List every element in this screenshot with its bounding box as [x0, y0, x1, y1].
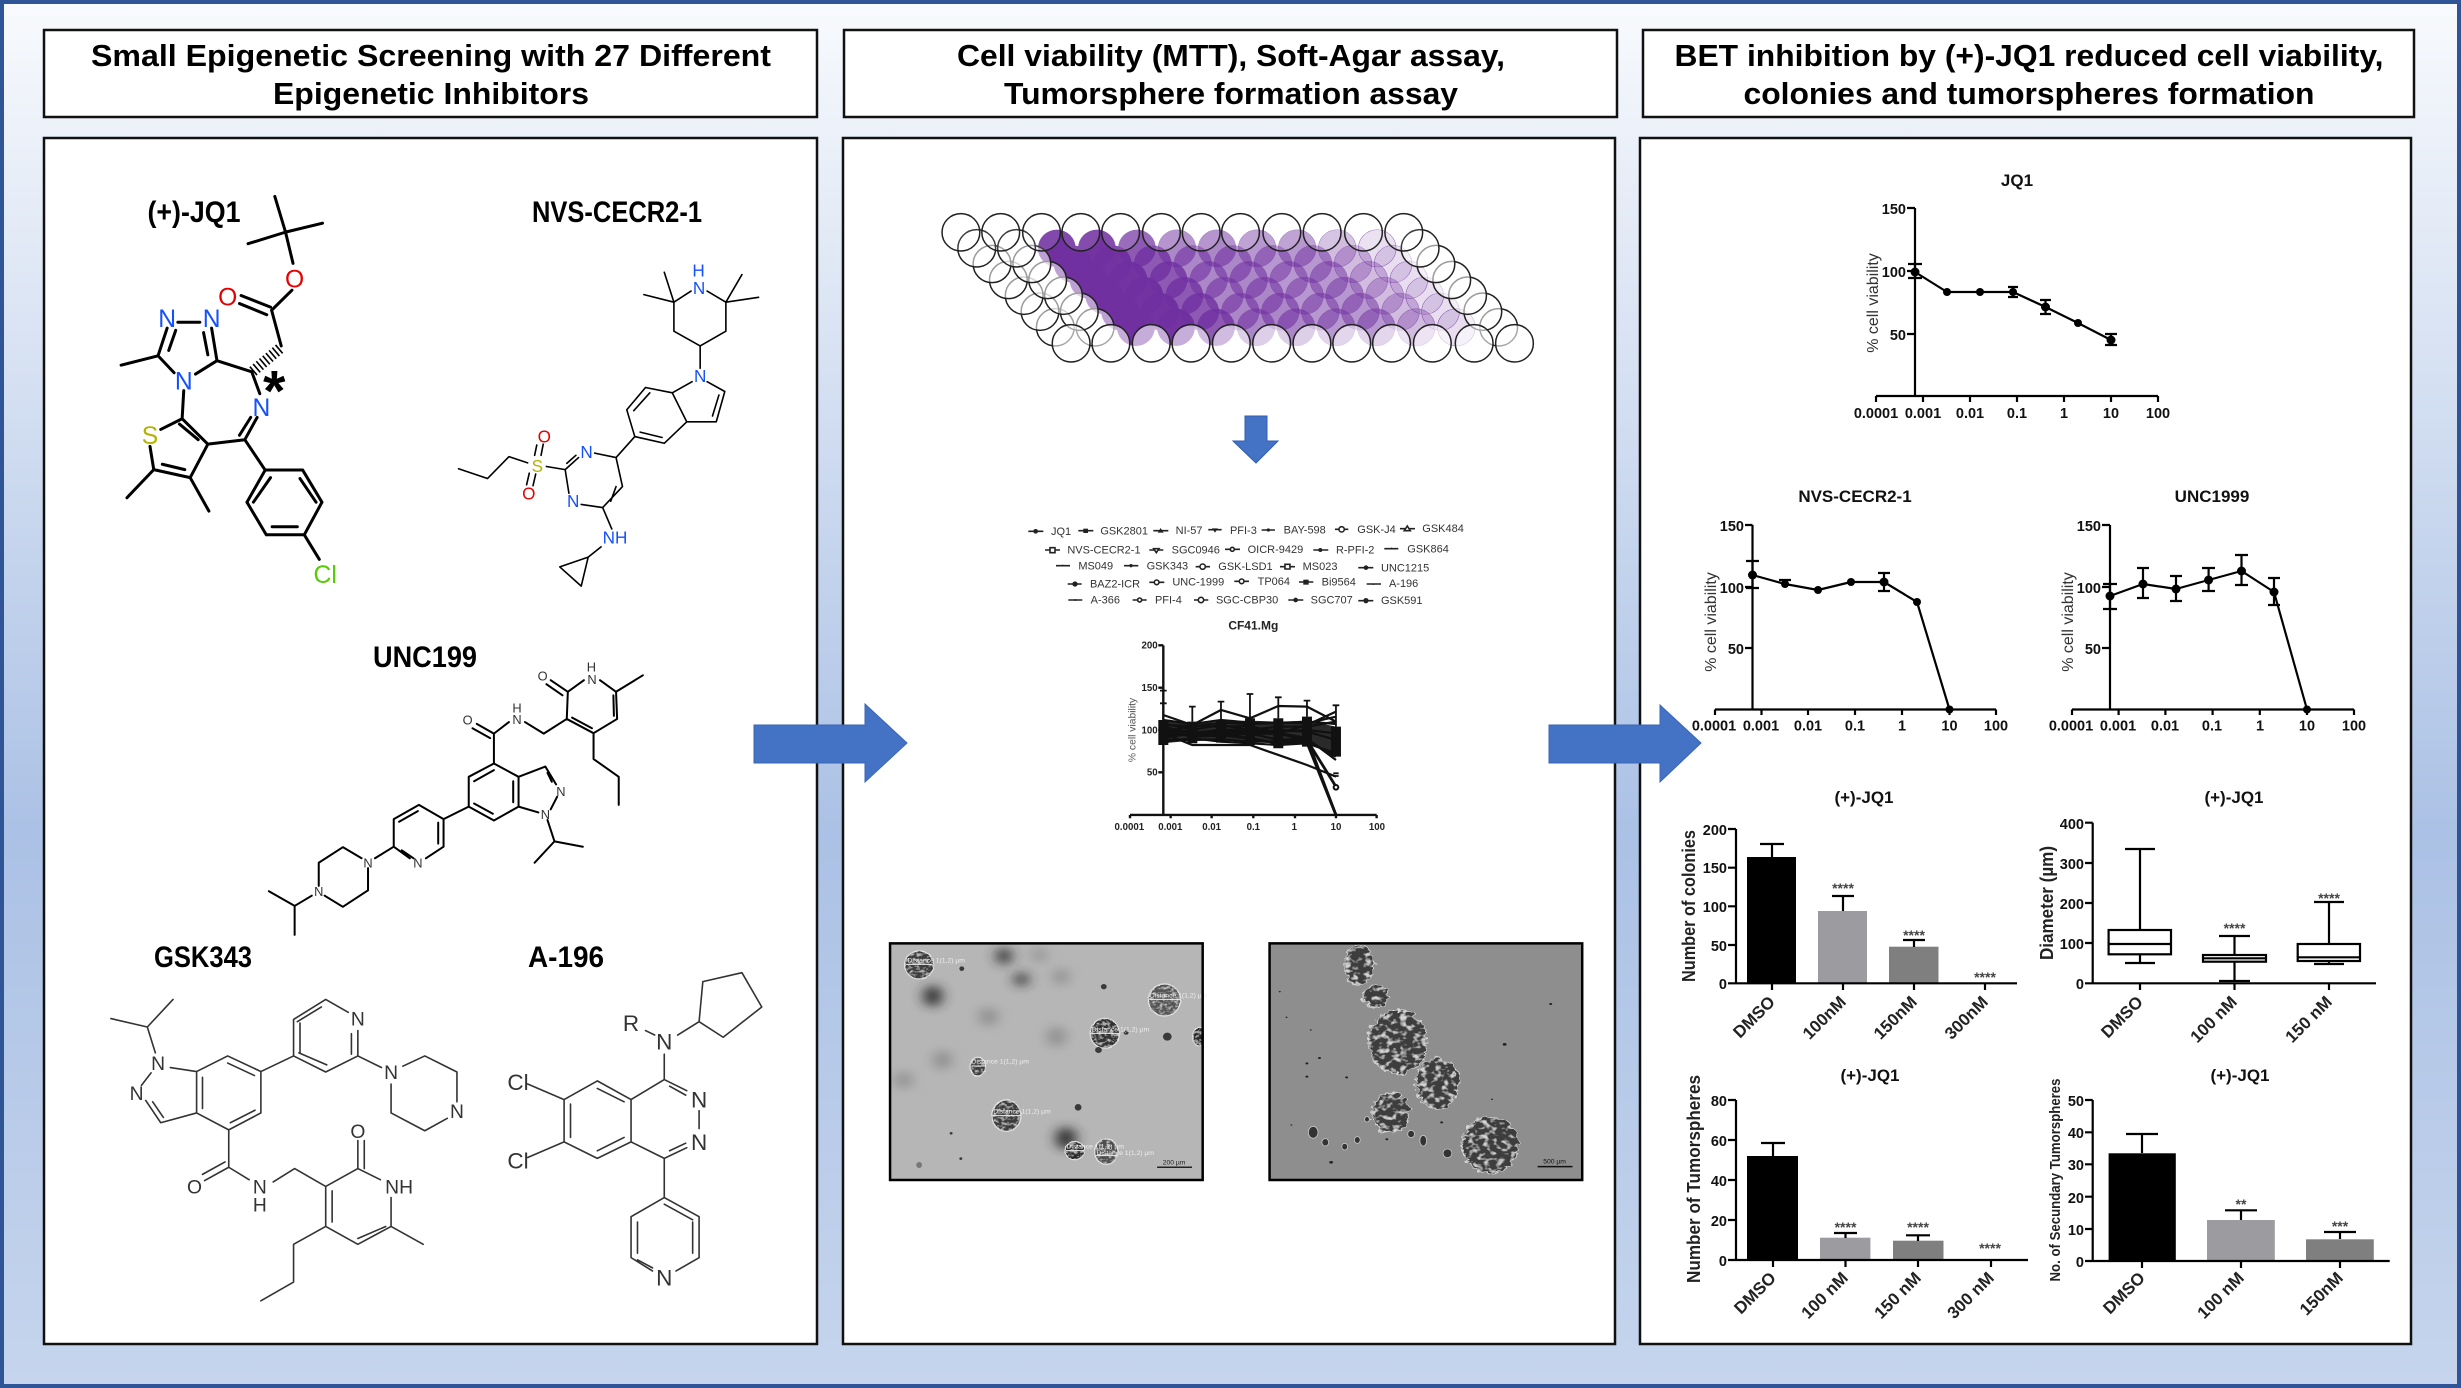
axes: % cell viability	[1127, 697, 1138, 762]
heading: left column: Small Epigenetic Screening with 27 Different	[91, 38, 771, 73]
legend: GSK591	[1381, 595, 1422, 607]
axes: 200	[1142, 641, 1158, 652]
structure: NVS-CECR2-1: S	[532, 456, 543, 476]
axes: 50	[1147, 768, 1158, 779]
structure: UNC199: O	[538, 669, 548, 684]
chart: secondary tumorspheres: **	[2236, 1196, 2247, 1212]
legend: NI-57	[1176, 525, 1203, 537]
legend: GSK484	[1422, 523, 1464, 535]
label: (+)-JQ1: (+)-JQ1	[148, 196, 240, 229]
chart: JQ1 viability: 10	[2103, 406, 2119, 422]
legend: MS023	[1303, 561, 1337, 573]
legend: A-366	[1091, 594, 1120, 606]
structure: NVS-CECR2-1: N	[567, 491, 579, 511]
chart: number of colonies: (+)-JQ1	[1834, 788, 1894, 807]
legend: GSK-J4	[1357, 524, 1396, 536]
chart: secondary tumorspheres: 50	[2068, 1094, 2084, 1110]
illustration: 96-well plate	[942, 214, 1533, 362]
heading: middle column: Cell viability (MTT), Soft-Agar assay,	[957, 38, 1505, 73]
structure: UNC199: N	[314, 884, 323, 899]
chart: secondary tumorspheres	[2047, 1066, 2390, 1323]
chart: secondary tumorspheres: ***	[2332, 1218, 2349, 1234]
chart: secondary tumorspheres: 30	[2068, 1158, 2084, 1174]
structure: NVS-CECR2-1: N	[693, 278, 705, 298]
chart: UNC1999 viability: 100	[2077, 581, 2101, 597]
label: NVS-CECR2-1: NVS-CECR2-1	[532, 196, 702, 229]
chart: number of tumorspheres: Number of Tumorspheres	[1684, 1075, 1704, 1283]
chart: JQ1 viability: 1	[2060, 406, 2068, 422]
heading: left column	[44, 30, 817, 117]
chart: secondary tumorspheres: 10	[2068, 1223, 2084, 1239]
chart title: CF41.Mg	[1228, 618, 1278, 632]
chart: number of colonies: 150nM	[1870, 992, 1921, 1043]
structure: A-196: N	[656, 1030, 672, 1055]
chart: UNC1999 viability: 50	[2085, 642, 2101, 658]
chart: NVS-CECR2-1 viability: 50	[1728, 642, 1744, 658]
chart: colony diameter box plot: DMSO	[2097, 992, 2147, 1042]
chart: secondary tumorspheres: 150nM	[2296, 1268, 2347, 1319]
chart: number of tumorspheres: ****	[1835, 1219, 1857, 1235]
structure: JQ1: N	[175, 368, 193, 395]
legend: A-196	[1389, 578, 1418, 590]
axes: 1	[1292, 822, 1298, 833]
structure: GSK343: H	[253, 1195, 267, 1216]
structure: A-196	[507, 973, 762, 1291]
chart: number of tumorspheres: 40	[1711, 1174, 1727, 1190]
legend: SGC-CBP30	[1216, 595, 1278, 607]
structure: JQ1: O	[285, 266, 304, 293]
chart: number of tumorspheres: 20	[1711, 1214, 1727, 1230]
structure: A-196: R	[623, 1011, 639, 1036]
micrograph: soft-agar colonies: Distance 1(1,2) µm	[1097, 1150, 1154, 1157]
legend: PFI-3	[1230, 525, 1257, 537]
chart: NVS-CECR2-1 viability: 100	[1984, 718, 2008, 734]
structure: JQ1: N	[203, 306, 221, 333]
structure: GSK343: N	[130, 1084, 144, 1105]
structure: GSK343: N	[450, 1102, 464, 1123]
panel: chemical structures	[44, 138, 817, 1344]
structure: JQ1: O	[218, 284, 237, 311]
axes: 0.001	[1158, 822, 1183, 833]
legend: GSK864	[1407, 543, 1449, 555]
chart: colony diameter box plot: 100	[2060, 937, 2084, 953]
chart: number of tumorspheres: ****	[1979, 1240, 2001, 1256]
chart: JQ1 viability: 0.001	[1905, 406, 1941, 422]
heading: right column	[1643, 30, 2414, 117]
axes: 10	[1331, 822, 1341, 833]
micrograph: tumorspheres	[1270, 943, 1582, 1180]
structure: NVS-CECR2-1: N	[694, 366, 706, 386]
chart: JQ1 viability: 0.1	[2007, 406, 2027, 422]
structure: UNC199: N	[587, 672, 597, 687]
structure: GSK343: N	[384, 1063, 398, 1084]
micrograph: soft-agar colonies: Distance 1(1,2) µm	[908, 958, 965, 965]
arrow: left to middle	[754, 704, 907, 782]
chart: secondary tumorspheres: 20	[2068, 1191, 2084, 1207]
chart: JQ1 viability: 100	[1882, 265, 1906, 281]
axes: 100	[1142, 725, 1158, 736]
micrograph: soft-agar colonies: Distance 1(1,2) µm	[993, 1108, 1051, 1115]
chart: number of tumorspheres: ****	[1907, 1219, 1929, 1235]
legend: GSK-LSD1	[1218, 561, 1273, 573]
chart: UNC1999 viability: 0.1	[2202, 718, 2222, 734]
band behind data series	[1163, 721, 1336, 755]
structure: GSK343: N	[253, 1178, 267, 1199]
structure: GSK343: NH	[385, 1178, 413, 1199]
chart: NVS-CECR2-1 viability: 10	[1941, 718, 1958, 734]
chart: number of colonies: DMSO	[1729, 992, 1779, 1042]
structure: GSK343: N	[151, 1054, 165, 1075]
chart: number of tumorspheres: 300 nM	[1944, 1268, 1998, 1323]
chart: JQ1 viability: 100	[2146, 406, 2170, 422]
structure: JQ1: N	[158, 306, 176, 333]
structure: GSK343: O	[187, 1178, 202, 1199]
panel: assays	[843, 138, 1615, 1344]
chart: colony diameter box plot: 0	[2076, 977, 2084, 993]
structure: NVS-CECR2-1	[459, 260, 759, 586]
chart: number of colonies: ****	[1832, 880, 1854, 896]
chart: NVS-CECR2-1 viability: 0.001	[1743, 718, 1779, 734]
chart: number of colonies: 200	[1703, 823, 1727, 839]
heading: right column: BET inhibition by (+)-JQ1 reduced cell viability,	[1674, 38, 2384, 73]
chart: colony diameter box plot: 300	[2060, 857, 2084, 873]
legend: BAY-598	[1284, 524, 1326, 536]
chart: JQ1 viability: 150	[1882, 202, 1906, 218]
chart: number of colonies: ****	[1903, 927, 1925, 943]
chart: number of tumorspheres: 150 nM	[1871, 1268, 1925, 1323]
chart: number of tumorspheres: (+)-JQ1	[1840, 1066, 1900, 1085]
chart: secondary tumorspheres: DMSO	[2099, 1268, 2149, 1318]
chart: colony diameter box plot: ****	[2224, 920, 2246, 936]
chart: NVS-CECR2-1 viability: 0.0001	[1692, 718, 1736, 734]
structure: A-196: N	[691, 1130, 707, 1155]
chart: UNC1999 viability: 0.0001	[2049, 718, 2093, 734]
structure: UNC199: N	[556, 784, 566, 799]
chart: secondary tumorspheres: (+)-JQ1	[2210, 1066, 2270, 1085]
heading: middle column	[844, 30, 1617, 117]
structure: GSK343: N	[351, 1010, 365, 1031]
structure: UNC199: H	[587, 660, 596, 675]
chart: CF41.Mg screening with legend	[1028, 523, 1464, 833]
legend: UNC-1999	[1172, 577, 1224, 589]
micrograph: soft-agar colonies: Distance 1(1,2) µm	[1092, 1026, 1150, 1033]
chart: UNC1999 viability: 0.01	[2151, 718, 2179, 734]
structure: UNC199: H	[512, 700, 522, 715]
label: GSK343: GSK343	[154, 941, 252, 974]
panel: BET inhibition results	[1640, 138, 2411, 1344]
structure: NVS-CECR2-1: O	[538, 426, 551, 446]
structure: A-196: N	[656, 1266, 672, 1291]
chart: number of colonies: 100	[1703, 900, 1727, 916]
structure: JQ1: *	[263, 360, 286, 424]
chart: colony diameter box plot: (+)-JQ1	[2204, 788, 2264, 807]
structure: NVS-CECR2-1: H	[692, 260, 705, 280]
chart: secondary tumorspheres: 100 nM	[2194, 1268, 2248, 1323]
chart: UNC1999 viability: 150	[2077, 519, 2101, 535]
structure: JQ1: Cl	[314, 562, 337, 589]
arrow: middle to right	[1549, 705, 1701, 782]
legend: SGC0946	[1172, 544, 1220, 556]
micrograph: soft-agar colonies: Distance 1(1,2) µm	[1150, 992, 1208, 999]
arrow: down	[1233, 416, 1278, 463]
legend: GSK343	[1147, 560, 1188, 572]
heading: right column: colonies and tumorspheres formation	[1744, 76, 2314, 111]
chart: colony diameter box plot: 400	[2060, 817, 2084, 833]
chart: colony diameter box plot: ****	[2318, 890, 2340, 906]
structure: NVS-CECR2-1: O	[522, 484, 535, 504]
axes: 150	[1142, 683, 1158, 694]
axes: 0.0001	[1115, 822, 1145, 833]
chart: JQ1 viability: % cell viability	[1865, 253, 1882, 353]
legend: NVS-CECR2-1	[1067, 545, 1141, 557]
structure: JQ1: N	[253, 395, 270, 422]
legend: SGC707	[1311, 594, 1353, 606]
micrograph: tumorspheres: 500 µm	[1543, 1159, 1566, 1166]
chart: number of colonies: 300nM	[1941, 992, 1992, 1043]
chart: UNC1999 viability	[2049, 487, 2366, 734]
chart: number of colonies: 100nM	[1799, 992, 1850, 1043]
legend: UNC1215	[1381, 562, 1429, 574]
chart: number of colonies	[1679, 788, 2017, 1043]
chart: secondary tumorspheres: 0	[2076, 1255, 2084, 1271]
structure: UNC199: O	[463, 713, 473, 728]
micrograph: soft-agar colonies: 200 µm	[1163, 1159, 1186, 1166]
chart: number of tumorspheres	[1684, 1066, 2028, 1323]
legend: Bi9564	[1322, 577, 1356, 589]
chart: UNC1999 viability: 1	[2256, 718, 2264, 734]
chart: UNC1999 viability: 10	[2299, 718, 2315, 734]
chart: number of colonies: 50	[1711, 939, 1727, 955]
chart: JQ1 viability: 0.01	[1956, 406, 1984, 422]
structure: UNC199: N	[541, 807, 550, 822]
chart: JQ1 viability: 0.0001	[1854, 406, 1898, 422]
error bars	[1160, 691, 1339, 790]
label: A-196: A-196	[528, 941, 604, 974]
chart: NVS-CECR2-1 viability: 0.01	[1794, 718, 1822, 734]
chart: NVS-CECR2-1 viability: 1	[1898, 718, 1906, 734]
chart: UNC1999 viability: UNC1999	[2175, 487, 2249, 506]
chart: UNC1999 viability: 100	[2342, 718, 2366, 734]
structure: NVS-CECR2-1: N	[580, 442, 593, 462]
chart: number of colonies: 150	[1703, 861, 1727, 877]
structure: A-196: Cl	[507, 1149, 529, 1174]
chart: colony diameter box plot: 150 nM	[2282, 992, 2336, 1047]
structure: JQ1: S	[142, 423, 158, 450]
heading: middle column: Tumorsphere formation assay	[1004, 76, 1459, 111]
legend: JQ1	[1051, 526, 1071, 538]
structure: NVS-CECR2-1: NH	[603, 527, 627, 547]
structure: UNC199: N	[413, 856, 422, 871]
chart: NVS-CECR2-1 viability: 100	[1720, 581, 1744, 597]
chart: NVS-CECR2-1 viability: 150	[1720, 519, 1744, 535]
axes	[1115, 641, 1385, 833]
data series	[1163, 706, 1336, 815]
legend: BAZ2-ICR	[1090, 579, 1140, 591]
chart: JQ1 viability	[1854, 171, 2170, 422]
structure: GSK343	[111, 999, 464, 1301]
chart: number of tumorspheres: 80	[1711, 1094, 1727, 1110]
chart: NVS-CECR2-1 viability: 0.1	[1845, 718, 1865, 734]
chart: colony diameter box plot: 200	[2060, 897, 2084, 913]
chart: colony diameter box plot: Diameter (µm)	[2037, 846, 2057, 960]
chart: colony diameter box plot	[2037, 788, 2376, 1047]
chart: JQ1 viability: 50	[1890, 328, 1906, 344]
chart: colony diameter box plot: 100 nM	[2187, 992, 2241, 1047]
chart: number of tumorspheres: 60	[1711, 1134, 1727, 1150]
chart: number of colonies: Number of colonies	[1679, 830, 1699, 982]
legend: GSK2801	[1100, 525, 1148, 537]
chart: UNC1999 viability: 0.001	[2100, 718, 2136, 734]
chart: JQ1 viability: JQ1	[2001, 171, 2033, 190]
structure: UNC199: N	[363, 856, 373, 871]
chart: secondary tumorspheres: No. of Secundary Tumorspheres	[2047, 1078, 2064, 1282]
legend: PFI-4	[1155, 594, 1182, 606]
micrograph: soft-agar colonies: Distance 1(1,2) µm	[1066, 1144, 1124, 1151]
chart: NVS-CECR2-1 viability: % cell viability	[1703, 572, 1720, 672]
legend: MS049	[1078, 560, 1113, 572]
structure: UNC199	[269, 660, 643, 935]
axes: 0.01	[1202, 822, 1222, 833]
legend: OICR-9429	[1248, 544, 1303, 556]
micrograph: soft-agar colonies: Distance 1(1,2) µm	[971, 1058, 1029, 1065]
structure: A-196: Cl	[507, 1070, 529, 1095]
structure: GSK343: O	[350, 1122, 365, 1143]
chart: NVS-CECR2-1 viability	[1692, 487, 2008, 734]
micrograph: soft-agar colonies	[890, 943, 1208, 1180]
chart: UNC1999 viability: % cell viability	[2060, 572, 2077, 672]
chart: number of tumorspheres: 0	[1719, 1254, 1727, 1270]
legend: TP064	[1258, 576, 1290, 588]
chart: number of tumorspheres: 100 nM	[1798, 1268, 1852, 1323]
heading: left column: Epigenetic Inhibitors	[273, 76, 589, 111]
chart: number of colonies: 0	[1719, 977, 1727, 993]
chart: number of colonies: ****	[1974, 969, 1996, 985]
axes: 100	[1369, 822, 1385, 833]
chart: NVS-CECR2-1 viability: NVS-CECR2-1	[1798, 487, 1912, 506]
structure: UNC199: N	[512, 712, 522, 727]
structure: A-196: N	[691, 1088, 707, 1113]
structure: JQ1	[121, 196, 337, 589]
chart: number of tumorspheres: DMSO	[1730, 1268, 1780, 1318]
legend: R-PFI-2	[1336, 544, 1374, 556]
axes: 0.1	[1247, 822, 1261, 833]
legend	[1028, 523, 1464, 607]
chart: secondary tumorspheres: 40	[2068, 1126, 2084, 1142]
label: UNC199: UNC199	[373, 641, 477, 674]
